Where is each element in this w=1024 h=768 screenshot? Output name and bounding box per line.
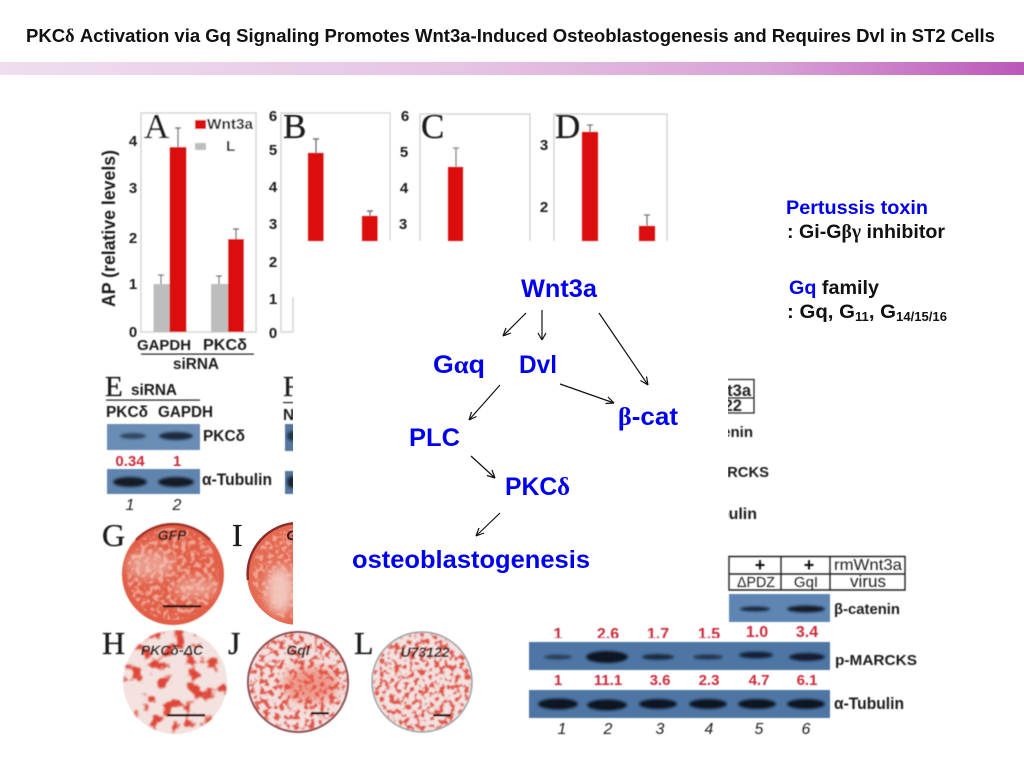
node: beta-catenin: β-cat	[618, 403, 679, 431]
node: PLC: PLC	[409, 424, 460, 452]
panel: bar chart D	[540, 107, 667, 241]
blot: p-MARCKS: p-MARCKS	[835, 652, 917, 669]
values: beta-catenin row: 2.6	[597, 626, 619, 643]
panel: stained dish L: U73122	[400, 644, 450, 660]
panel: western blot E: GAPDH	[158, 404, 213, 421]
blot: alpha-tubulin	[529, 690, 904, 718]
arrow: Wnt3a to beta-catenin	[599, 313, 648, 385]
node: Dvl: Dvl	[519, 351, 557, 379]
note: pertussis toxin: : Gi-Gβγ inhibitor	[787, 221, 945, 243]
note: pertussis toxin	[786, 197, 945, 243]
values: p-MARCKS row: 6.1	[797, 672, 817, 689]
panel: western blot right fragments: p-MARCKS	[690, 465, 769, 481]
panel: stained dish I fragment: GqI	[286, 527, 311, 543]
panel: bar chart A: 2	[129, 230, 137, 247]
arrow: Dvl to beta-catenin	[560, 384, 614, 404]
lane numbers	[558, 721, 811, 738]
note: Gq family	[787, 277, 947, 324]
panel: bar chart A: 0	[129, 324, 137, 341]
values: p-MARCKS row: 3.6	[650, 672, 670, 689]
node: Wnt3a: Wnt3a	[521, 275, 598, 303]
lane numbers: 1	[558, 721, 566, 738]
panel: western blot E: 1	[126, 497, 134, 514]
note: pertussis toxin: Pertussis toxin	[786, 197, 928, 219]
note: Gq family: 11	[855, 310, 869, 324]
blot: p-MARCKS	[529, 642, 917, 670]
blot: alpha-tubulin: α-Tubulin	[834, 695, 904, 713]
panel: stained dish G: G	[102, 517, 125, 553]
values: p-MARCKS row: 4.7	[749, 672, 769, 689]
panel: western blot E: α-Tubulin	[202, 471, 272, 489]
note: Gq family: 14/15/16	[896, 310, 947, 324]
panel: stained dish H: PKCδ-ΔC	[141, 642, 204, 658]
table: treatment header	[729, 555, 905, 591]
values: p-MARCKS row: 1	[554, 672, 562, 689]
values: beta-catenin row: 1.5	[698, 626, 720, 643]
panel: western blot E	[105, 371, 272, 514]
panel: bar chart C	[399, 107, 530, 241]
lane numbers: 5	[755, 721, 764, 738]
note: Gq family: Gq family	[789, 277, 879, 299]
panel: bar chart B	[269, 107, 390, 342]
panel: bar chart C: C	[421, 107, 444, 146]
panel: bar chart B: 2	[269, 254, 277, 271]
panel: western blot right fragments: α-Tubulin	[685, 506, 757, 523]
arrow: G alpha q to PLC	[469, 385, 500, 420]
panel: western blot E: 0.34	[115, 453, 145, 470]
arrow: Wnt3a to G alpha q	[503, 313, 526, 336]
panel: western blot F fragment: F	[283, 371, 299, 403]
table: treatment header: GqI	[794, 574, 818, 591]
pathway diagram	[352, 275, 679, 574]
panel: stained dish I fragment: I	[232, 517, 243, 553]
lane numbers: 6	[802, 721, 811, 738]
panel: stained dish L	[354, 625, 472, 732]
panel: stained dish I fragment	[233, 522, 293, 625]
blot: beta-catenin	[729, 594, 900, 622]
note: Gq family: , G	[869, 301, 896, 323]
panel: bar chart B: 0	[269, 325, 277, 342]
node: PKC delta: PKCδ	[505, 473, 570, 501]
panel: stained dish J: J	[228, 625, 240, 661]
panel: western blot E: PKCδ	[203, 428, 245, 445]
table: treatment header: +	[755, 555, 765, 575]
panel: bar chart A: siRNA	[173, 356, 219, 373]
blot: beta-catenin: β-catenin	[834, 601, 900, 618]
values: p-MARCKS row: 11.1	[594, 672, 622, 689]
panel: western blot right fragments	[728, 378, 770, 520]
panel: western blot E: 1	[173, 453, 181, 470]
panel: stained dish L: L	[354, 625, 374, 661]
lane numbers: 2	[603, 721, 613, 738]
panel: western blot right fragments: U73122	[684, 397, 742, 415]
panel: bar chart B: 5	[269, 142, 277, 159]
panel: western blot F fragment: N	[283, 407, 294, 424]
panel: bar chart A: GAPDH	[137, 337, 191, 354]
panel: bar chart B: 4	[269, 179, 278, 196]
panel: western blot right fragments: β-catenin	[686, 424, 753, 441]
panel: bar chart A	[99, 107, 256, 373]
values: p-MARCKS row: 2.3	[699, 672, 719, 689]
panel: stained dish J: GqI	[286, 642, 311, 658]
panel: stained dish G: GFP	[158, 527, 187, 543]
panel: stained dish G	[102, 517, 224, 625]
panel: bar chart B: 6	[269, 108, 277, 125]
table: treatment header: rmWnt3a	[834, 557, 902, 574]
panel: bar chart C: 6	[401, 108, 409, 125]
table: treatment header: virus	[850, 572, 886, 591]
panel: bar chart A: AP (relative levels)	[99, 150, 119, 307]
lane numbers: 4	[705, 721, 714, 738]
panel: bar chart A: 1	[129, 276, 137, 293]
panel: western blot right fragments: Wnt3a	[702, 382, 752, 400]
arrow: PKC delta to osteoblastogenesis	[476, 513, 500, 536]
panel: stained dish J	[228, 625, 348, 732]
values: beta-catenin row: 3.4	[796, 624, 818, 641]
panel: bar chart A: L	[226, 138, 235, 155]
panel: bar chart A: 3	[129, 180, 137, 197]
panel: stained dish H: H	[102, 625, 125, 661]
values: beta-catenin row	[554, 625, 819, 639]
panel: bar chart A: 4	[129, 133, 138, 150]
panel: bar chart A: A	[144, 107, 170, 146]
panel: western blot F fragment	[282, 376, 293, 495]
arrow: Wnt3a to Dvl	[538, 310, 546, 340]
node: G alpha q: Gαq	[433, 351, 485, 379]
panel: western blot lower right	[529, 555, 917, 738]
panel: bar chart B: 3	[269, 216, 277, 233]
panel: bar chart D: 2	[540, 199, 548, 216]
panel: bar chart B: 1	[269, 291, 277, 308]
panel: bar chart D: D	[555, 107, 580, 146]
values: beta-catenin row: 1	[554, 626, 563, 643]
panel: stained dish H	[102, 625, 227, 734]
panel: bar chart C: 3	[399, 216, 407, 233]
title: PKCδ Activation via Gq Signaling Promotes Wnt3a-Induced Osteoblastogenesis and Requires Dvl in ST2 Cells	[26, 25, 995, 47]
panel: bar chart A: Wnt3a	[207, 116, 254, 133]
table: treatment header: ΔPDZ	[737, 575, 775, 591]
panel: western blot E: PKCδ	[106, 404, 148, 421]
arrow: PLC to PKC delta	[471, 456, 495, 478]
values: beta-catenin row: 1.7	[647, 626, 669, 643]
panel: western blot E: 2	[172, 497, 182, 514]
panel: bar chart C: 5	[400, 144, 408, 161]
values: p-MARCKS row	[554, 672, 817, 689]
header gradient band	[0, 62, 1024, 75]
note: Gq family: : Gq, G	[787, 301, 852, 323]
panel: western blot E: E	[105, 371, 123, 403]
panel: bar chart D: 3	[540, 137, 548, 154]
node: osteoblastogenesis: osteoblastogenesis	[352, 546, 590, 574]
panel: western blot E: siRNA	[131, 382, 177, 399]
panel: bar chart B: B	[283, 107, 306, 146]
lane numbers: 3	[656, 721, 665, 738]
panel: bar chart C: 4	[400, 180, 409, 197]
values: beta-catenin row: 1.0	[746, 624, 768, 641]
panel: bar chart A: PKCδ	[203, 337, 247, 354]
table: treatment header: +	[804, 555, 814, 575]
